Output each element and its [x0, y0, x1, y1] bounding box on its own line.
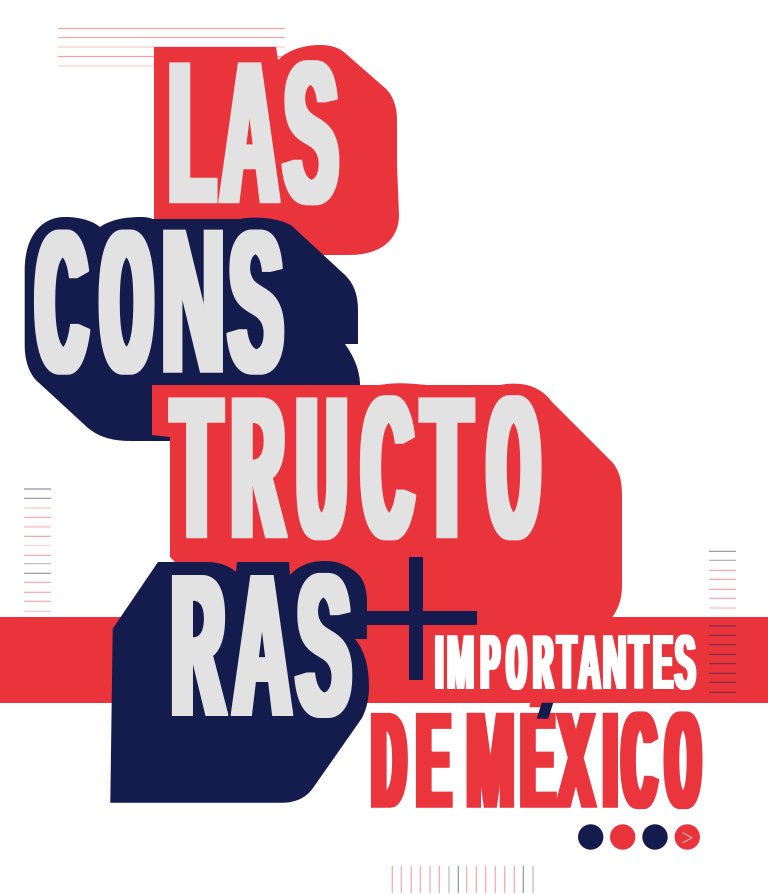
dot navy second	[642, 824, 668, 850]
text RAS: RAS	[170, 540, 351, 779]
red backing shape for LAS	[154, 45, 399, 255]
navy accent mark over the E	[537, 703, 553, 719]
arrow button	[675, 824, 700, 850]
title word: RAS	[110, 540, 369, 803]
heading: IMPORTANTES: N	[603, 619, 626, 706]
text LAS: LAS	[164, 27, 338, 266]
heading: DE MÉXICO: CO	[621, 689, 701, 852]
title word: LAS	[154, 27, 399, 266]
navy backing shape for CONS	[25, 217, 360, 441]
text CONS: CO	[34, 196, 154, 435]
red backing shape for TRUCTO	[152, 383, 622, 640]
heading: DE MÉXICO: I	[602, 684, 618, 838]
pagination dots with arrow	[578, 824, 700, 850]
text CONS	[34, 187, 283, 435]
red horizontal band	[0, 617, 768, 703]
heading: DE MÉXICO: ÉX	[520, 686, 594, 852]
text TRUCTO: TRUCTO	[169, 362, 541, 601]
heading: DE MÉXICO: DE	[370, 689, 489, 852]
dot navy	[578, 824, 603, 850]
title word: CONS	[25, 187, 360, 441]
heading: IMPORTANTES	[435, 619, 696, 714]
text CONS: N	[161, 187, 225, 416]
dot red	[610, 824, 635, 850]
heading: IMPORTANTES: PORTA	[480, 621, 600, 714]
heading: DE MÉXICO: M	[466, 684, 514, 838]
navy backing shape for RAS	[110, 561, 369, 803]
heading: IMPORTANTES: TES	[628, 621, 696, 714]
plus sign	[367, 557, 477, 680]
heading: IMPORTANTES: IM	[435, 619, 474, 706]
heading: DE MÉXICO	[370, 684, 701, 852]
text CONS: S	[229, 196, 283, 435]
title word: TRUCTO	[152, 362, 622, 640]
